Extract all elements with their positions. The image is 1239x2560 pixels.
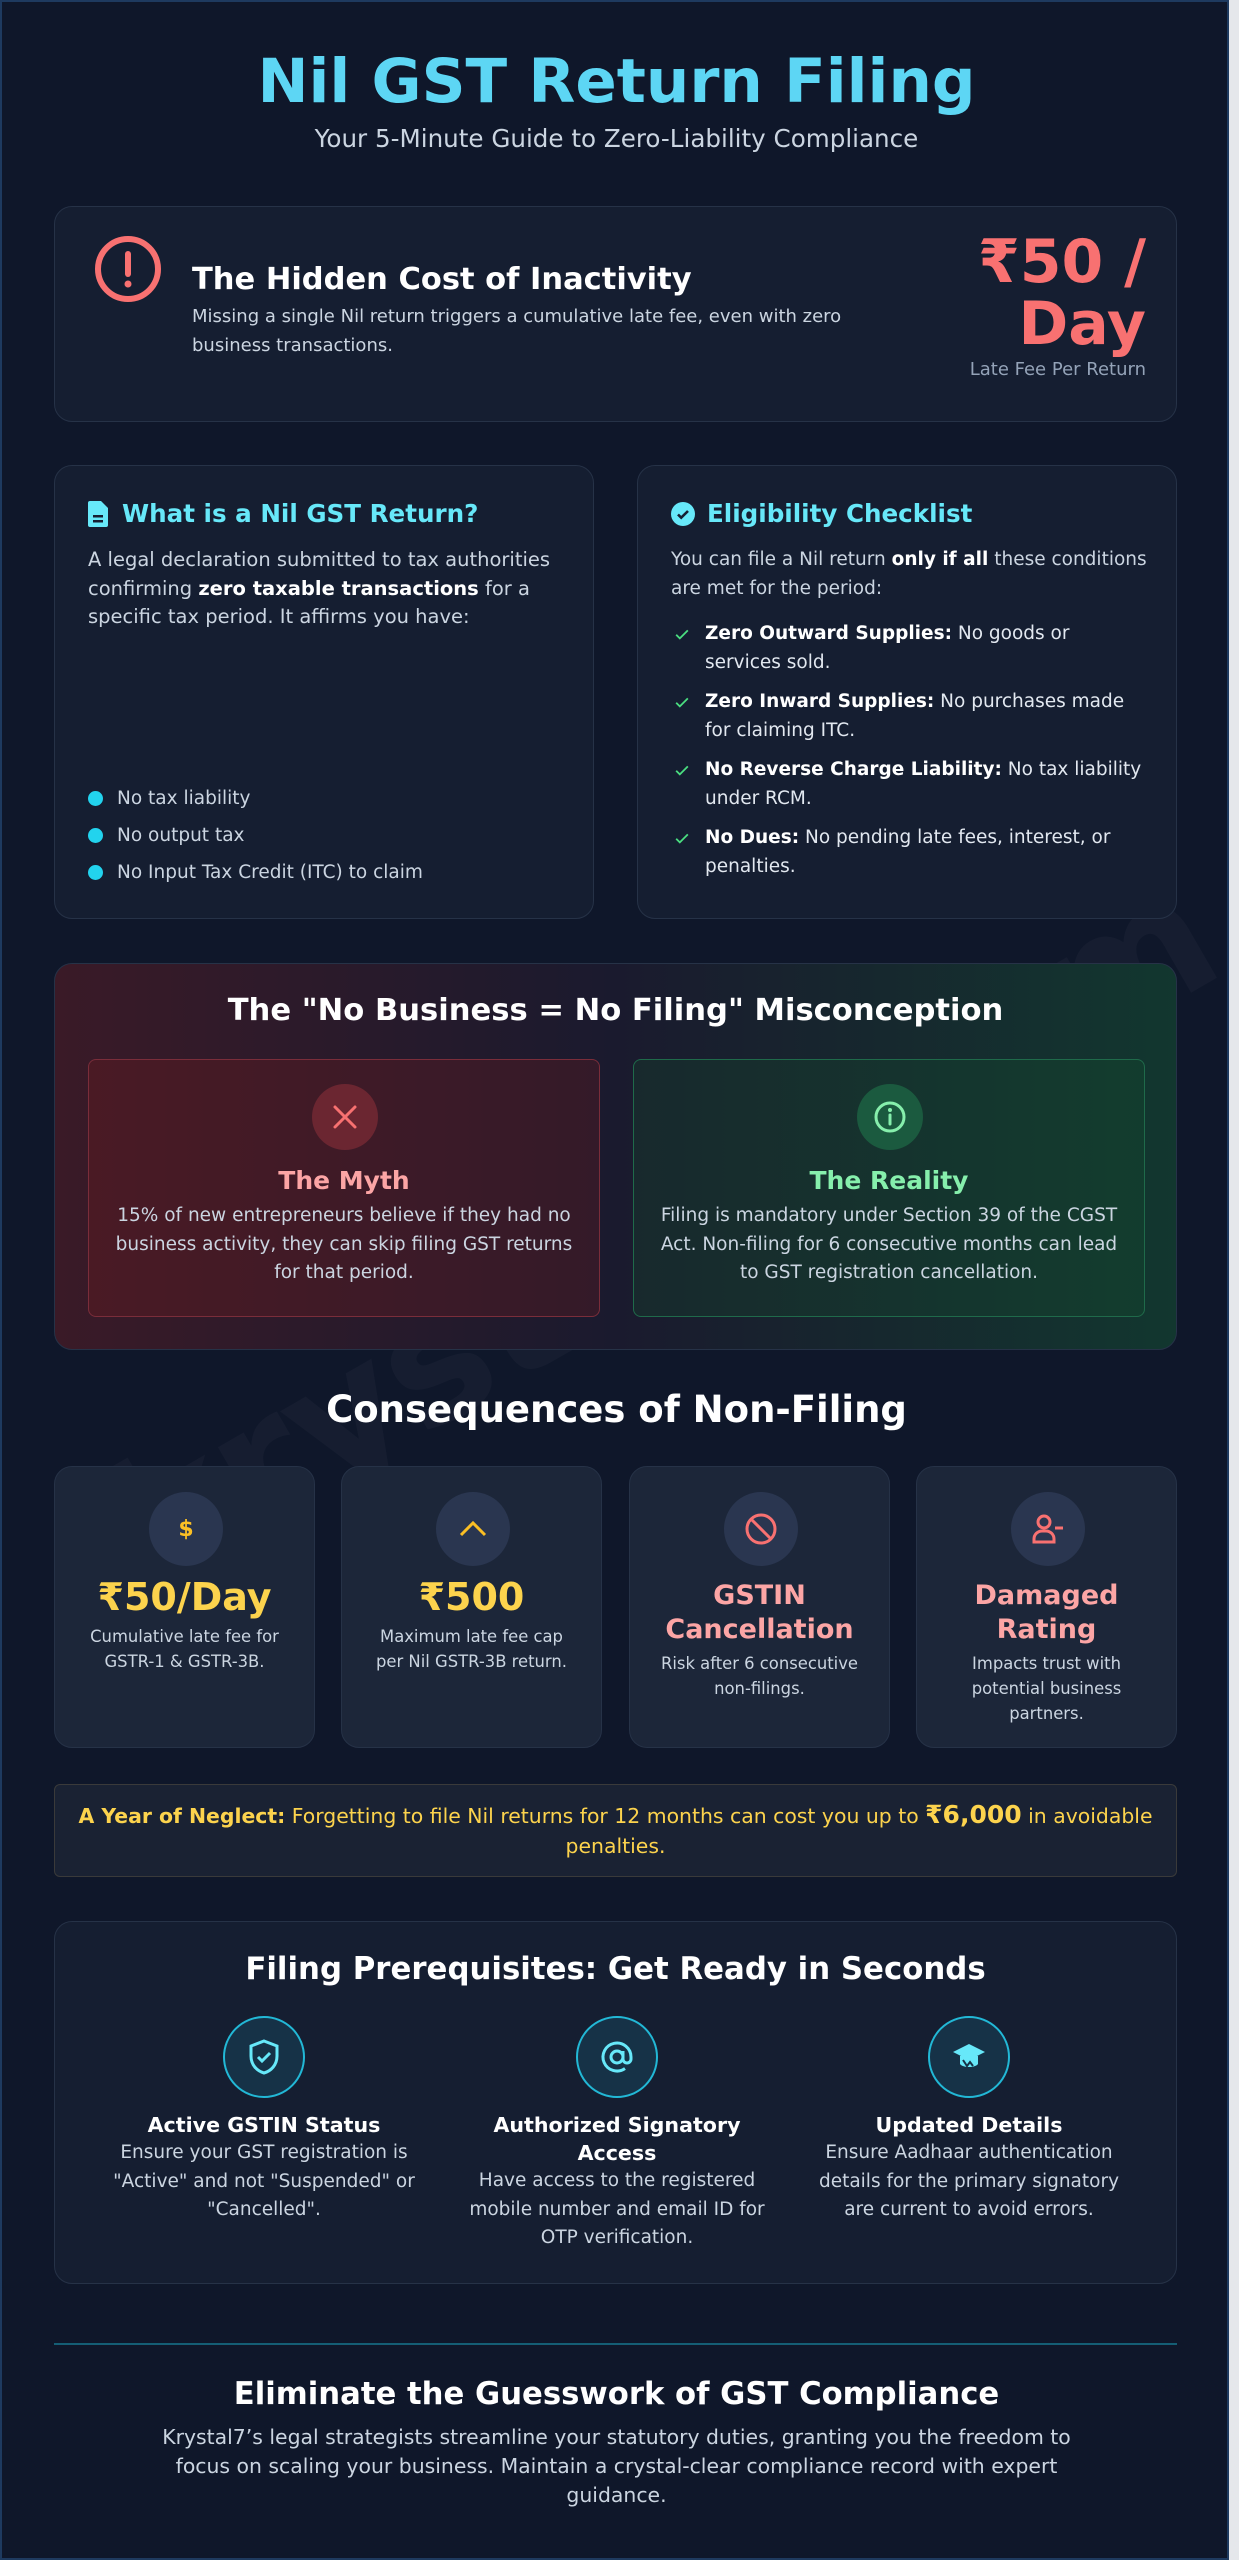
bullet list: No output tax [117,825,244,846]
footer heading: Eliminate the Guesswork of GST Compliance [234,2377,999,2412]
heading: The "No Business = No Filing" Misconception [228,993,1003,1028]
checklist: Zero Inward Supplies: No purchases made [705,691,1124,712]
text [671,549,1147,598]
stat: Late Fee Per Return [970,359,1146,380]
checklist: for claiming ITC. [705,720,855,740]
card: damaged rating [916,1466,1177,1748]
heading: What is a Nil GST Return? [122,499,478,528]
footer text: focus on scaling your business. Maintain a crystal-clear compliance record with expert [176,2454,1057,2478]
item: signatory: Access [578,2141,656,2165]
item: active gstin: Ensure your GST registration is [120,2142,408,2163]
text [116,1166,572,1283]
text: The Myth [278,1166,410,1195]
card: 50/day: $ [178,1516,194,1542]
footer text: Krystal7’s legal strategists streamline your statutory duties, granting you the freedom to [162,2425,1071,2449]
text: Filing is mandatory under Section 39 of the CGST [661,1205,1117,1226]
item: updated details: Ensure Aadhaar authentication [825,2142,1113,2163]
checklist: Zero Outward Supplies: No goods or [705,623,1069,644]
icon: x [312,1084,378,1150]
item: signatory: Authorized Signatory [493,2113,741,2137]
footer text [162,2425,1071,2507]
card: damaged rating: potential business [972,1679,1121,1698]
text: 15% of new entrepreneurs believe if they had no [117,1205,571,1226]
card: 500: ₹500 [419,1575,524,1619]
checklist: under RCM. [705,788,812,808]
callout: year of neglect: A Year of Neglect: Forgetting to file Nil returns for 12 months can cost you up to ₹6,000 in avoidable [78,1800,1152,1829]
text [661,1166,1118,1283]
checklist: services sold. [705,652,831,672]
card: 50/day [54,1466,315,1748]
item: signatory: mobile number and email ID for [469,2198,765,2220]
item: signatory: Have access to the registered [479,2170,755,2191]
card: gstin cancellation: Risk after 6 consecutive [661,1654,858,1673]
myth box [88,1059,600,1317]
panel: misconception [54,963,1177,1350]
heading: Filing Prerequisites: Get Ready in Seconds [245,1951,986,1987]
panel: hidden cost [54,206,1177,422]
checklist: No Dues: No pending late fees, interest, or [705,827,1110,848]
footer text: guidance. [566,2483,667,2507]
icon: info [857,1084,923,1150]
item: updated details: details for the primary signatory [819,2170,1119,2192]
card: gstin cancellation: GSTIN [713,1580,806,1611]
item: signatory: OTP verification. [541,2227,693,2248]
reality box [633,1059,1145,1317]
text: for that period. [274,1262,414,1283]
card: damaged rating: Damaged [975,1580,1118,1611]
item: updated details: are current to avoid errors. [844,2199,1094,2220]
text: are met for the period: [671,578,882,598]
stat [970,227,1146,380]
bullet list: No tax liability [117,788,250,809]
text: Missing a single Nil return triggers a cumulative late fee, even with zero [192,306,841,327]
bullet list [88,788,423,883]
panel: prerequisites [54,1921,1177,2284]
text: Act. Non-filing for 6 consecutive months can lead [661,1234,1117,1254]
item: active gstin [113,2016,415,2220]
card: 500: per Nil GSTR-3B return. [376,1652,567,1671]
heading: Eligibility Checklist [707,499,972,528]
watermark: krystal7.com [76,835,1229,1627]
card: 500: Maximum late fee cap [380,1627,563,1646]
item: updated details [819,2016,1119,2220]
text: You can file a Nil return only if all these conditions [671,549,1147,570]
card: 50/day: ₹50/Day [98,1575,272,1619]
heading: The Hidden Cost of Inactivity [192,262,692,297]
item: active gstin: Active GSTIN Status [148,2113,380,2137]
card: damaged rating: Rating [997,1614,1096,1645]
checklist: No Reverse Charge Liability: No tax liability [705,759,1141,780]
card: 50/day: Cumulative late fee for [90,1627,279,1646]
text: business activity, they can skip filing GST returns [116,1234,572,1254]
text [88,548,550,628]
text: A legal declaration submitted to tax authorities [88,548,550,571]
card: gstin cancellation: Cancellation [665,1614,854,1645]
text [192,306,841,356]
item: active gstin: "Cancelled". [207,2199,321,2220]
stat: ₹50 / [978,227,1146,297]
callout: year of neglect [54,1784,1177,1877]
card: damaged rating: partners. [1009,1704,1084,1723]
panel: what is nil [54,465,594,919]
card: gstin cancellation: non-filings. [714,1679,805,1698]
text: confirming zero taxable transactions for a [88,576,530,600]
item: updated details: Updated Details [875,2113,1062,2137]
panel: eligibility [637,465,1177,919]
card: 500 [341,1466,602,1748]
text: to GST registration cancellation. [740,1262,1038,1283]
checklist: penalties. [705,856,796,876]
text: specific tax period. It affirms you have: [88,605,470,628]
heading: consequences: Consequences of Non-Filing [326,1388,907,1431]
item: signatory [469,2016,765,2248]
card: gstin cancellation [629,1466,890,1748]
text: business transactions. [192,334,393,356]
text: The Reality [810,1166,968,1195]
item: active gstin: "Active" and not "Suspended" or [113,2170,415,2192]
title: Nil GST Return Filing [257,46,976,117]
subtitle: Your 5-Minute Guide to Zero-Liability Compliance [315,124,918,153]
card: damaged rating: Impacts trust with [972,1654,1121,1673]
card: 50/day: GSTR-1 & GSTR-3B. [104,1652,265,1671]
callout: year of neglect: penalties. [566,1834,665,1858]
checklist [676,623,1141,876]
bullet list: No Input Tax Credit (ITC) to claim [117,862,423,883]
icon: warning [95,236,161,302]
stat: Day [1018,289,1146,359]
